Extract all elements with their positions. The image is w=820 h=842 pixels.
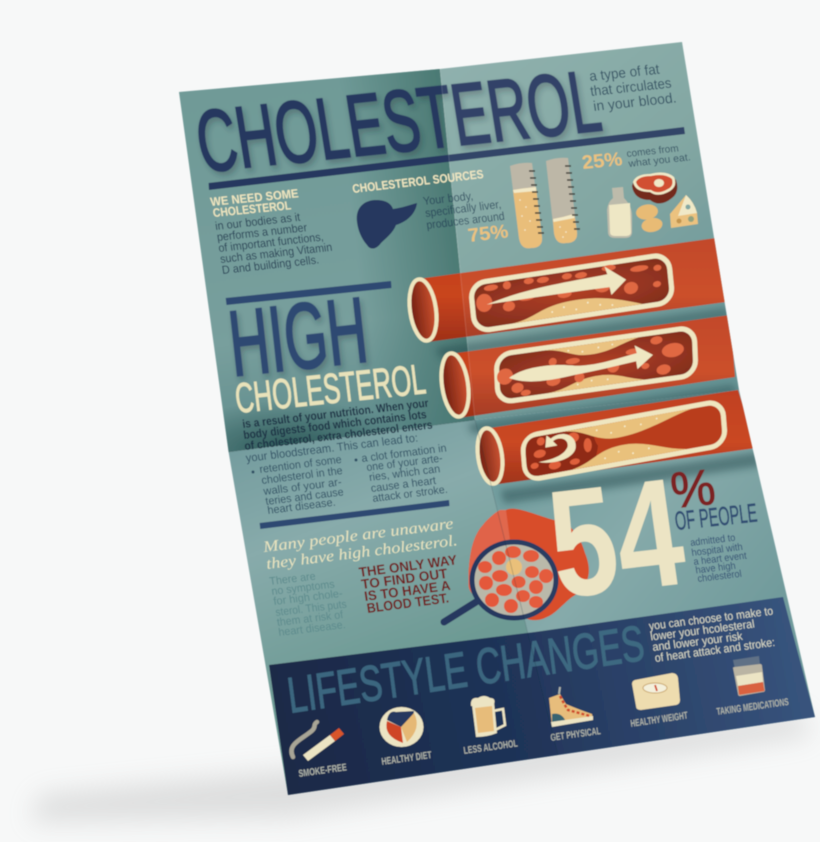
stat: 75 percent: 75% [467, 221, 510, 247]
heading: we need some cholesterol: CHOLESTEROL [212, 198, 292, 220]
icon: liver [357, 200, 417, 249]
text: no symptoms: no symptoms [271, 578, 336, 598]
text: no symptoms [269, 571, 348, 639]
label: of people: OF PEOPLE [673, 498, 759, 536]
icon: potatoes [635, 203, 664, 234]
title underline [209, 127, 685, 190]
artery 2 [438, 315, 735, 418]
text: lifestyle intro: lower your hcolesteral [650, 618, 755, 643]
ground shadow [30, 712, 812, 822]
text: retention bullet: teries and cause [265, 486, 344, 508]
text: we need some cholesterol body: D and building cells. [221, 254, 320, 277]
text: result of your nutrition: body digests food which contains lots [243, 408, 427, 442]
text: clot bullet: a clot formation in [361, 442, 447, 465]
text: no symptoms: heart disease. [278, 619, 346, 639]
text: result of your nutrition: is a result of your nutrition. When your [242, 397, 430, 431]
text: no symptoms: sterol. This puts [275, 599, 348, 619]
text: comes from what you eat: what you eat. [627, 152, 691, 170]
text: admitted to hospital: a heart event [693, 551, 748, 568]
text: your body: specifically liver, [424, 198, 502, 220]
stat: 25 percent: 25% [581, 149, 624, 174]
text: many people unaware: they have high cholesterol. [265, 532, 459, 573]
blob behind magnifier [468, 509, 589, 620]
text: admitted to hospital: hospital with [691, 542, 743, 559]
icon: healthy diet plate [380, 707, 424, 747]
text: retention bullet: walls of your ar- [262, 476, 343, 498]
text: clot bullet: one of your arte- [366, 453, 444, 474]
heading: we need some cholesterol [209, 186, 299, 220]
text: no symptoms: them at risk of [276, 609, 345, 629]
artery 3 window [522, 401, 726, 481]
text: many people unaware [261, 515, 459, 573]
text: your body [422, 191, 505, 232]
label: healthy weight: HEALTHY WEIGHT [630, 710, 689, 730]
callout: only way blood test: BLOOD TEST. [366, 590, 450, 616]
icon: medication jar [733, 656, 765, 696]
definition text: in your blood. [592, 89, 677, 114]
text: retention bullet: cholesterol in the [261, 465, 343, 487]
label: get physical: GET PHYSICAL [550, 726, 601, 744]
icon: cigarette [291, 722, 344, 761]
text: lifestyle intro: you can choose to make to [648, 605, 774, 633]
text: we need some cholesterol body: in our bodies as it [214, 212, 302, 233]
definition text [588, 61, 677, 114]
label: less alcohol: LESS ALCOHOL [463, 739, 518, 757]
text: result of your nutrition: of cholesterol, extra cholesterol enters [244, 418, 433, 453]
artery 2 opening [438, 352, 472, 418]
artery 1 opening [406, 277, 440, 343]
poster [179, 42, 815, 795]
icon: cheese [670, 195, 698, 228]
text: we need some cholesterol body: performs a number [216, 222, 308, 244]
icon: beer mug [471, 696, 505, 737]
text: clot bullet: ries, which can [368, 463, 441, 484]
definition text: that circulates [589, 75, 672, 99]
text: comes from what you eat: comes from [626, 143, 679, 160]
heading: lifestyle changes: LIFESTYLE CHANGES [284, 614, 647, 724]
stat: 54: 54 [539, 446, 694, 631]
text: result of your nutrition [242, 397, 433, 465]
artery 2 window [496, 327, 696, 403]
artery 1 window [470, 254, 673, 332]
icon: test tube 25 [546, 158, 580, 243]
text: we need some cholesterol body [214, 212, 333, 277]
panel: lifestyle band background [269, 597, 815, 795]
text: admitted to hospital: cholesterol [697, 569, 742, 585]
text: retention bullet [252, 454, 344, 517]
text: admitted to hospital [690, 533, 748, 585]
tube shadows [436, 308, 762, 504]
artery 1 [406, 238, 726, 343]
text: clot bullet [354, 442, 448, 505]
heading: cholesterol cream: CHOLESTEROL [232, 355, 428, 422]
icon: test tube 75 [510, 163, 544, 248]
text: lifestyle intro: and lower your risk [652, 630, 744, 654]
text: retention bullet: heart disease. [267, 497, 336, 517]
icon: steak [632, 173, 677, 204]
callout: only way blood test [358, 552, 458, 616]
text: clot bullet: cause a heart [370, 475, 437, 495]
callout: only way blood test: IS TO HAVE A [363, 578, 452, 604]
heading: we need some cholesterol: WE NEED SOME [209, 186, 299, 209]
heading: cholesterol sources: CHOLESTEROL SOURCES [351, 167, 484, 196]
bar above high cholesterol [226, 281, 392, 305]
heading: high: HIGH [224, 277, 372, 396]
label: smoke-free: SMOKE-FREE [298, 762, 348, 780]
callout: only way blood test: TO FIND OUT [360, 566, 449, 592]
text: lifestyle intro: of heart attack and stroke: [654, 636, 776, 665]
text: no symptoms: for high chole- [273, 588, 344, 608]
label: healthy diet: HEALTHY DIET [381, 750, 433, 768]
stat: percent sign: % [668, 458, 718, 519]
text: admitted to hospital: admitted to [690, 533, 737, 549]
text: comes from what you eat [626, 143, 691, 170]
text: clot bullet: attack or stroke. [372, 484, 448, 505]
text: your body: Your body, [422, 191, 474, 208]
text: your body: produces around [426, 210, 505, 232]
icon: bathroom scale [632, 673, 680, 710]
icon: sneaker [549, 687, 593, 727]
text: many people unaware: Many people are unaware [261, 515, 455, 556]
text: lifestyle intro [648, 605, 776, 665]
text: no symptoms: There are [269, 571, 316, 588]
icon: magnifying glass with blood cells [444, 542, 556, 622]
text: retention bullet: retention of some [259, 454, 342, 476]
divider bar [260, 500, 450, 529]
icon: milk bottle [607, 187, 632, 238]
panel: paper background [179, 42, 815, 795]
artery 3 [474, 390, 756, 485]
circular arrow [538, 433, 577, 464]
text: admitted to hospital: have high [695, 561, 736, 576]
text: result of your nutrition: your bloodstream. This can lead to: [245, 431, 419, 465]
text: we need some cholesterol body: such as making Vitamin [219, 242, 333, 266]
callout: only way blood test: THE ONLY WAY [358, 552, 458, 580]
definition text: a type of fat [588, 61, 661, 84]
text: we need some cholesterol body: of important functions, [218, 232, 324, 255]
artery 3 opening [474, 427, 506, 485]
